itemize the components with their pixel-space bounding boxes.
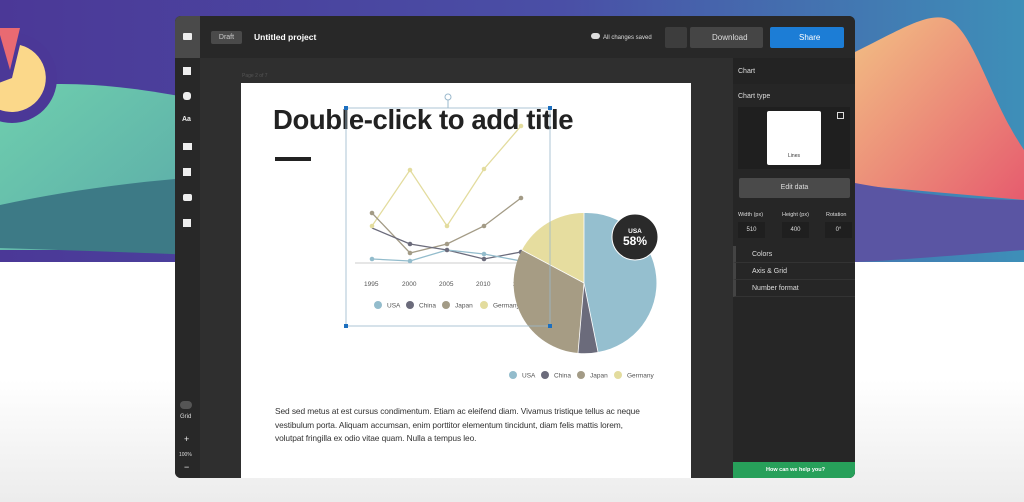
line chart: USA — [387, 302, 401, 310]
callout: USA 58% — [612, 214, 658, 260]
left sidebar: + — [184, 434, 189, 444]
line chart: Germany — [493, 302, 520, 310]
help button — [733, 462, 855, 478]
right panel: Rotation — [826, 212, 846, 218]
pie chart: USA — [522, 372, 536, 380]
save status — [591, 33, 652, 41]
right panel — [733, 58, 855, 478]
page — [241, 83, 691, 483]
right panel: Axis & Grid — [752, 268, 787, 275]
share: Share — [799, 33, 820, 42]
top bar — [175, 16, 855, 58]
download — [690, 27, 763, 48]
right panel: 0° — [836, 227, 841, 233]
save status: All changes saved — [603, 35, 652, 41]
help button: How can we help you? — [766, 467, 825, 473]
selection box — [344, 94, 552, 328]
line chart: 2015 — [513, 281, 528, 288]
paragraph: Sed sed metus at est cursus condimentum. Etiam ac eleifend diam. Vivamus tristique tellus ac neque vestibulum porta. Aliquam accumsan, enim porttitor elementum tincidunt, diam felis mattis lorem, volutpat fringilla ex odio vitae quam. Nulla a tempus leo. — [275, 406, 640, 443]
left sidebar: Aa — [182, 116, 191, 123]
right panel: Lines — [788, 153, 800, 159]
callout: USA 58%: 58% — [623, 234, 647, 248]
line chart: China — [419, 302, 436, 310]
right panel: Width (px) — [738, 212, 763, 218]
right panel: Chart — [738, 68, 755, 75]
right panel: Number format — [752, 285, 799, 292]
right panel: Colors — [752, 251, 772, 258]
pie chart: Germany — [627, 372, 654, 380]
right panel: Height (px) — [782, 212, 809, 218]
callout: USA 58%: USA — [628, 228, 642, 235]
line chart: 2005 — [439, 281, 454, 288]
line chart: 2000 — [402, 281, 417, 288]
pie chart: Japan — [590, 372, 608, 380]
right panel: 510 — [746, 227, 756, 233]
line chart — [355, 124, 540, 310]
line chart: 1995 — [364, 281, 379, 288]
left sidebar: Grid — [180, 414, 191, 420]
right panel: Edit data — [781, 184, 808, 191]
line chart: Japan — [455, 302, 473, 310]
icon: pie — [0, 28, 57, 123]
app window: Page 2 of 7 — [242, 73, 268, 79]
title: Double-click to add title — [273, 104, 573, 135]
app window — [175, 16, 855, 478]
right panel: Chart type — [738, 93, 770, 100]
pie chart: China — [554, 372, 571, 380]
top bar: Untitled project — [254, 32, 316, 42]
right panel: 400 — [790, 227, 800, 233]
share — [770, 27, 844, 48]
top bar: Draft — [219, 34, 234, 41]
left sidebar — [175, 58, 200, 478]
download: Download — [712, 33, 748, 42]
line chart: 2010 — [476, 281, 491, 288]
pie chart — [509, 213, 656, 380]
left sidebar: − — [184, 462, 189, 472]
left sidebar: 100% — [179, 452, 192, 458]
